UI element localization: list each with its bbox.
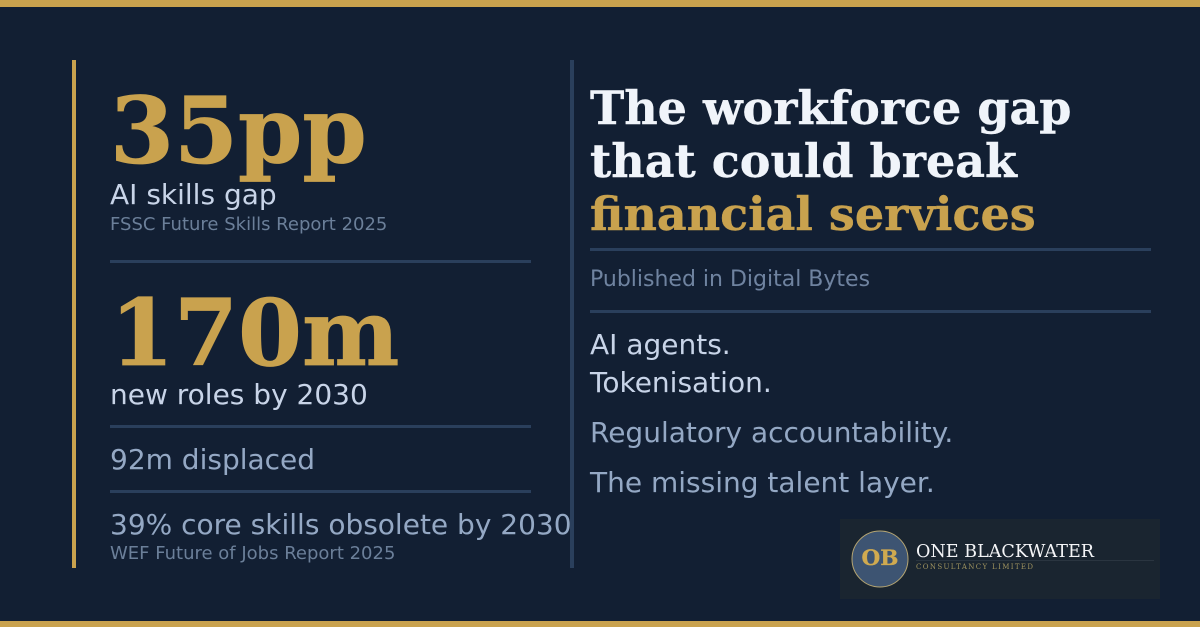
stat: 35pp: 35pp bbox=[110, 76, 367, 184]
company name: ONE BLACKWATER bbox=[916, 541, 1094, 562]
text: missing talent layer: The missing talent layer. bbox=[589, 466, 935, 499]
company subtitle: CONSULTANCY LIMITED bbox=[916, 563, 1033, 571]
title: The workforce gap bbox=[590, 81, 1071, 135]
label: new roles: new roles by 2030 bbox=[110, 378, 368, 411]
source: WEF: WEF Future of Jobs Report 2025 bbox=[110, 543, 395, 564]
label: AI skills gap: AI skills gap bbox=[110, 178, 277, 211]
icon: OB circle bbox=[852, 531, 908, 587]
title highlight: financial services bbox=[590, 187, 1036, 241]
panel: statistics bbox=[72, 60, 572, 568]
text: Tokenisation: Tokenisation. bbox=[589, 366, 772, 399]
label: 39% core skills: 39% core skills obsolete by 2030 bbox=[110, 508, 572, 541]
panel: headline bbox=[589, 81, 1151, 499]
title: that could break bbox=[590, 134, 1018, 188]
text: AI agents: AI agents. bbox=[590, 328, 731, 361]
logo: One Blackwater bbox=[840, 519, 1160, 599]
stat: 170m: 170m bbox=[110, 279, 399, 387]
text: Regulatory accountability: Regulatory accountability. bbox=[590, 416, 953, 449]
source: FSSC: FSSC Future Skills Report 2025 bbox=[110, 214, 387, 235]
gold accent bar bbox=[72, 60, 76, 568]
top gold band bbox=[0, 0, 1200, 7]
label: 92m displaced: 92m displaced bbox=[110, 443, 315, 476]
published line: Published in Digital Bytes bbox=[590, 267, 870, 292]
icon: OB circle: OB bbox=[862, 546, 898, 571]
bottom gold band bbox=[0, 621, 1200, 627]
